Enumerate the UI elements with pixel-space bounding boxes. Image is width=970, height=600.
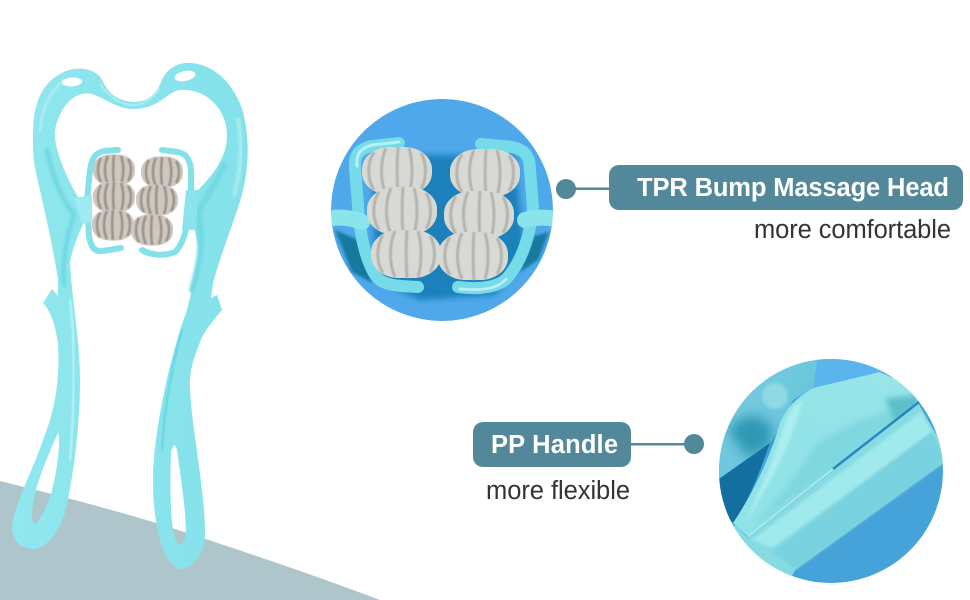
dark corner shadows xyxy=(335,230,372,283)
caption: more flexible: more flexible xyxy=(486,477,630,505)
right bracket large xyxy=(458,144,533,288)
ear holes xyxy=(62,77,82,87)
top blue wedge xyxy=(813,359,882,388)
detail circle: handle xyxy=(719,359,943,583)
connector: handle xyxy=(630,434,704,454)
label: PP Handle: PP Handle xyxy=(491,431,618,459)
connector: massage head xyxy=(556,179,610,199)
left bracket large xyxy=(326,142,556,290)
label: TPR Bump Massage Head: TPR Bump Massage Head xyxy=(637,174,949,202)
left bracket xyxy=(87,150,121,251)
caption: more comfortable: more comfortable xyxy=(754,216,951,244)
label: PP Handle xyxy=(473,422,631,467)
rollers xyxy=(93,154,135,186)
rollers large xyxy=(362,147,432,195)
handle frame xyxy=(12,63,248,569)
gap line xyxy=(833,402,919,469)
label: TPR Bump Massage Head xyxy=(609,165,963,210)
detail circle: massage head xyxy=(326,99,556,321)
lower strap xyxy=(734,404,943,576)
neck massager product xyxy=(12,63,248,569)
junctions xyxy=(74,195,92,224)
background wedge xyxy=(0,481,380,600)
frame shading xyxy=(40,80,241,460)
main body xyxy=(733,372,930,537)
right bracket xyxy=(142,150,191,255)
dark gap region xyxy=(719,443,770,523)
upper left plastic xyxy=(719,360,818,478)
shadow behind rollers xyxy=(372,155,525,300)
